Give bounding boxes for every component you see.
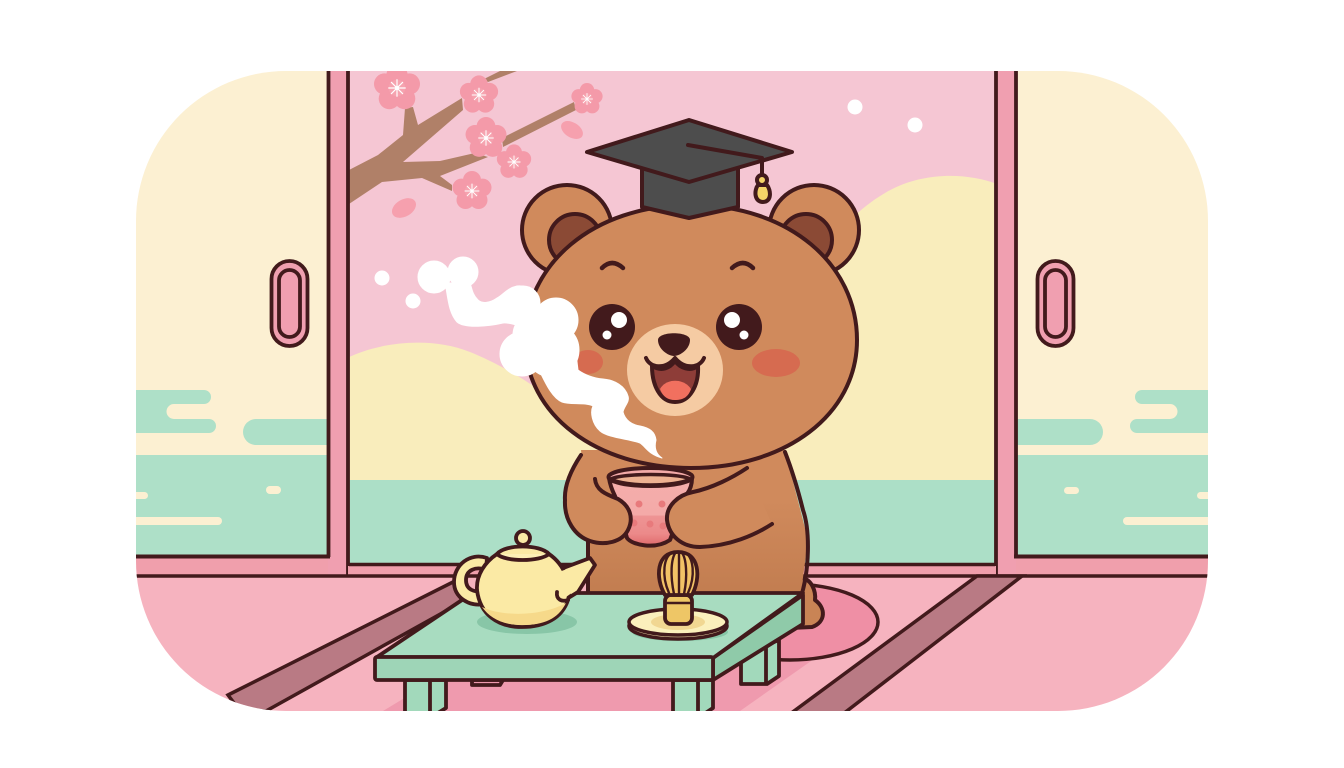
matcha whisk on dish [629,552,728,641]
table top [377,593,803,658]
table side [713,595,803,680]
clouds [1016,390,1214,445]
dish well [651,614,705,630]
knob [516,531,530,545]
handle [454,557,487,605]
blossoms [374,64,603,209]
cup [608,468,692,546]
falling petals [392,121,583,218]
under-table bar [472,680,503,685]
window view: left hill [347,343,600,482]
body [477,546,569,627]
dish [629,609,727,635]
window view: right hill [784,176,994,480]
head [525,205,857,468]
body [581,450,808,600]
spout [558,558,595,600]
eyebrows [602,263,753,268]
teapot shadow [477,610,577,634]
teapot [454,531,595,634]
cherry branch [349,64,603,222]
whisk binding [665,602,692,604]
bear [522,185,859,628]
cheeks [573,349,800,377]
right ear [769,185,859,275]
right shoji door [1016,71,1215,557]
left ear [522,185,612,275]
lid [497,554,549,560]
whisk handle [665,595,692,624]
left shoji door [130,71,328,557]
window view: sky [350,71,994,386]
floor [130,576,1214,716]
right eye [716,304,762,350]
dish base [629,613,727,639]
table front [375,657,713,680]
body shade [482,603,566,625]
wooden frame rail [130,556,1214,576]
spout joint [557,592,568,601]
illustration: bear tea scene [136,71,1208,711]
right door post [996,71,1016,576]
left tatami stripe [228,581,462,711]
tail [797,578,825,630]
table [375,593,803,716]
left door handle [272,261,308,346]
cap tassel [688,145,770,202]
left arm [565,455,631,543]
water ripples [1064,487,1215,525]
mouth [646,358,704,402]
steam [418,257,662,458]
cushion [780,584,880,662]
right tatami stripe [790,576,1022,714]
dish shadow [632,623,728,641]
window view: water [347,480,997,566]
left door post [328,71,348,576]
left eye [589,304,635,350]
front right leg [673,680,713,716]
right door handle [1038,261,1074,346]
nose [658,333,690,356]
snow dots [374,100,922,308]
right arm [667,468,772,547]
water ripples [130,486,281,525]
whisk tine lines [664,552,693,594]
front left leg [405,680,446,716]
floor mat [384,660,812,711]
spout fill over seam [559,561,588,597]
back right leg [741,640,779,684]
muzzle [627,324,723,416]
whisk tines [659,552,697,595]
graduation cap [587,120,792,218]
clouds [130,390,328,445]
